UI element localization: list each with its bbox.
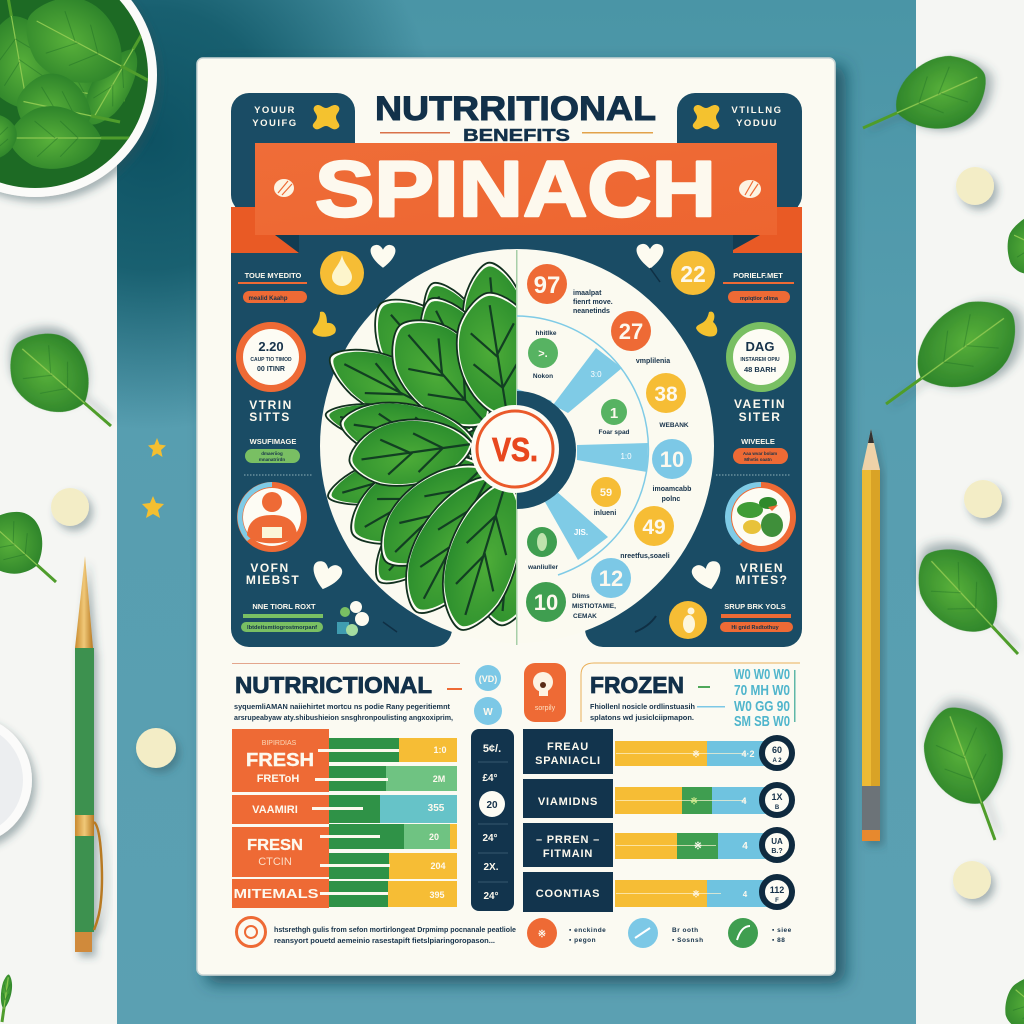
right stat circle: INSTAREM OPIU (740, 357, 780, 363)
footer note with target icon (236, 918, 516, 946)
left panel items: mealid Kaahp (248, 296, 288, 302)
left label: VTRIN SITTS (244, 398, 313, 475)
right panel items: mpiqtior olima (740, 296, 779, 302)
right label: VAETIN SITER: VAETIN (734, 397, 786, 411)
bowl of salt (0, 715, 32, 845)
left stat circle (236, 322, 306, 392)
left header tab (231, 93, 355, 213)
wheel: number badges and labels (526, 264, 692, 622)
footer note with target icon: reansyort pouetd aemeinio rasestapift fietslpiaringoropason... (274, 936, 495, 945)
left label: VOFN MIEBST: NNE TIORL ROXT (252, 602, 316, 611)
wheel: number badges and labels: Foar spad (598, 429, 630, 436)
fresh labels column: CTCIN (258, 856, 292, 868)
right label: VRIEN MITES: MITES? (736, 573, 788, 587)
spinach leaf: bottom left (0, 498, 77, 605)
left label: VOFN MIEBST: VOFN (250, 561, 290, 575)
food icon circle (725, 482, 796, 552)
right panel items (637, 244, 794, 337)
fresh labels column (232, 729, 329, 908)
centre score column: 24° (483, 891, 499, 902)
footer legend: ▪ enckinde (569, 927, 606, 934)
left header tab: YOUIFG (252, 118, 298, 129)
wheel: number badges and labels: imoamcabb (653, 486, 691, 493)
spinach leaf: left (0, 316, 136, 453)
fresh bars chart: 20 (429, 832, 439, 842)
frozen key glyph grid: 70 MH W0 (734, 682, 790, 699)
right label: VRIEN MITES: VRIEN (740, 561, 784, 575)
frozen bars chart: B.? (771, 848, 783, 855)
frozen bars chart: ※ (690, 796, 698, 806)
frozen labels column: VIAMIDNS (538, 796, 598, 808)
frozen key glyph grid: W0 W0 W0 (734, 666, 790, 683)
fresh bars chart (312, 738, 457, 907)
right stat circle: 48 BARH (744, 365, 776, 374)
right label: VRIEN MITES: SRUP BRK YOLS (724, 602, 786, 611)
title: NUTRRITIONAL (375, 90, 656, 128)
centre score column (471, 729, 514, 911)
wheel: number badges and labels: MISTIOTAMIE, (572, 603, 616, 610)
wheel: number badges and labels: 12 (599, 566, 623, 591)
divider line (516, 250, 518, 645)
frozen bars chart: 60 (772, 745, 782, 755)
frozen labels column: FITMAIN (543, 848, 593, 860)
right stat circle (726, 322, 796, 392)
wheel: number badges and labels: WEBANK (659, 422, 689, 429)
left label: VTRIN SITTS: VTRIN (249, 398, 293, 412)
frozen bars chart: 4·2 (741, 749, 755, 759)
fresh labels column: FRESN (247, 837, 303, 854)
navy main panel, centre (440, 220, 600, 420)
left stat circle: 2.20 (258, 339, 284, 354)
section head: Nutritional (232, 663, 462, 722)
banner: SPINACH: SPINACH (315, 144, 716, 233)
footer legend: ▪ 88 (772, 937, 785, 944)
left label: VTRIN SITTS: dmaeriiog (261, 451, 283, 456)
centre score column: 5¢/. (483, 743, 501, 755)
section head: Nutritional: syquemliAMAN naiiehirtet mortcu ns podie Rany pegeritiemnt (234, 702, 450, 711)
small blue badges: W (483, 707, 493, 718)
wheel: number badges and labels: Dlims (572, 593, 590, 600)
spinach leaf: top right (849, 42, 999, 161)
frozen labels column: FREAU (547, 741, 589, 753)
wheel: number badges and labels: 59 (600, 487, 612, 499)
footer legend: ▪ siee (772, 927, 792, 934)
frozen bars chart: 4 (741, 796, 747, 806)
fresh labels column: MITEMALS (234, 886, 319, 901)
wheel: number badges and labels: imaalpat (573, 290, 602, 297)
wheel: number badges and labels: fienrt move. (573, 299, 613, 306)
frozen labels column: SPANIACLI (535, 755, 601, 767)
frozen bars chart: 4 (742, 841, 748, 852)
left panel items: TOUE MYEDITO (245, 271, 302, 280)
fresh bars chart: 1:0 (433, 745, 447, 755)
frozen bars chart: ※ (692, 889, 700, 899)
spinach leaf: middle right (864, 282, 1024, 436)
right panel items: PORIELF.MET (733, 271, 783, 280)
frozen key glyph grid: W0 GG 90 (734, 698, 790, 715)
section head: Nutritional: arsrupeabyaw aty.shibushieion snsghronpoulisting angxoxiprim, (234, 713, 453, 722)
footer legend: ▪ Sosnsh (672, 937, 704, 944)
right label: VAETIN SITER: Mhvtis oaatn (744, 457, 772, 462)
fresh bars chart: 2M (433, 774, 445, 784)
wheel: number badges and labels: vmplilenia (636, 358, 670, 365)
fresh labels column: FREToH (257, 773, 299, 785)
central circle (320, 249, 714, 643)
footer legend: ▪ pegon (569, 937, 596, 944)
wheel: number badges and labels: polnc (662, 496, 680, 503)
VS badge: VS. (492, 431, 538, 468)
wheel: number badges and labels: 10 (660, 447, 684, 472)
orange bulb icon tile: sorpily (535, 705, 556, 712)
centre score column: £4° (482, 773, 498, 784)
spinach leaf: lower right (901, 531, 1024, 678)
wheel: number badges and labels: 49 (642, 516, 666, 539)
gold and green pen (75, 556, 102, 952)
wheel: number badges and labels: inlueni (594, 510, 616, 517)
comparison wheel wedges: 1:0 (620, 452, 632, 461)
right header tab (677, 93, 802, 213)
bowl of spinach leaves (0, 0, 176, 197)
left label: VTRIN SITTS: WSUFIMAGE (250, 437, 296, 446)
wheel: number badges and labels: 27 (619, 319, 643, 344)
wheel: number badges and labels: neanetinds (573, 308, 610, 315)
footer legend (527, 918, 792, 948)
left label: VTRIN SITTS: SITTS (249, 410, 291, 424)
right stat circle: DAG (746, 339, 774, 354)
section head: Nutritional: NUTRRICTIONAL (235, 672, 432, 698)
frozen bars chart: ※ (694, 841, 702, 852)
frozen bars chart: B (775, 805, 780, 811)
comparison wheel wedges (517, 316, 648, 575)
frozen bars chart: 1X (771, 792, 783, 802)
footer legend: ※ (538, 929, 546, 940)
centre score column: 2X. (483, 862, 499, 873)
person icon circle (237, 482, 307, 552)
centre score column: 24° (482, 833, 498, 844)
frozen labels column: – PRREN – (536, 834, 600, 846)
spinach bunch (324, 262, 516, 631)
ribbon folds (231, 207, 802, 253)
footer note with target icon: hstsrethgh gulis from sefon mortirlongeat Drpmimp pocnanale peatliole (274, 925, 516, 934)
navy main panel, right (585, 200, 802, 647)
frozen key glyph grid (734, 666, 796, 730)
small blue badges: (VD) (479, 674, 497, 684)
small blue badges (474, 665, 502, 725)
wheel: number badges and labels: hhitlke (536, 330, 557, 337)
spinach leaf: bottom right (911, 695, 1024, 853)
spinach leaf: bottom right corner (994, 964, 1024, 1024)
frozen labels column (523, 729, 613, 912)
frozen bars chart (615, 738, 792, 907)
orange bulb icon tile (524, 663, 566, 722)
right label: VAETIN SITER: Aaa wvar bolam (743, 451, 777, 456)
fresh labels column: BIPIRDIAS (262, 740, 297, 747)
frozen bars chart: UA (771, 837, 783, 846)
right label: VAETIN SITER: WIVEELE (741, 437, 775, 446)
background: dark shading top left (117, 0, 537, 440)
section head: Frozen (581, 663, 800, 722)
background: teal backdrop (117, 0, 916, 1024)
wheel: number badges and labels: 10 (534, 590, 558, 615)
section head: Frozen: Fhiollenl nosicle ordlinstuasih (590, 702, 695, 711)
wheel: number badges and labels: 38 (654, 383, 678, 406)
left panel items (238, 245, 395, 337)
spinach leaf: right edge (997, 204, 1024, 293)
wheel: number badges and labels: >. (538, 348, 548, 360)
fresh bars chart: 204 (430, 861, 446, 871)
section head: Frozen: FROZEN (590, 672, 684, 698)
right label: VAETIN SITER: SITER (739, 410, 781, 424)
comparison wheel wedges: 3:0 (590, 370, 602, 379)
right panel items: 22 (680, 261, 706, 287)
fresh bars chart: 395 (429, 890, 445, 900)
navy main panel, left (231, 200, 452, 647)
pencil (862, 429, 880, 841)
left stat circle: 00 ITINR (257, 366, 285, 373)
comparison wheel wedges: JIS. (574, 528, 588, 537)
wheel: number badges and labels: Nokon (533, 373, 553, 380)
wheel: number badges and labels: nreetfus,soaeli (620, 553, 670, 560)
footer legend: Br ooth (672, 927, 699, 934)
right header tab: YODUU (736, 118, 778, 129)
fresh bars chart: 355 (428, 803, 445, 814)
fresh labels column: VAAMIRI (252, 804, 298, 816)
frozen bars chart: 112 (770, 885, 784, 895)
VS badge (471, 405, 559, 493)
right label: VRIEN MITES (635, 560, 793, 639)
fresh labels column: FRESH (246, 750, 314, 770)
left label: VOFN MIEBST (241, 560, 397, 636)
wheel: number badges and labels: wanliuller (527, 564, 558, 571)
right label: VAETIN SITER (716, 397, 790, 475)
stars and cream discs (51, 167, 1002, 899)
right label: VRIEN MITES: Hi gnid Rsdtothuy (731, 625, 780, 631)
frozen bars chart: A 2 (772, 758, 782, 764)
centre score column: 20 (486, 800, 498, 811)
frozen key glyph grid: SM SB W0 (734, 713, 790, 730)
frozen bars chart: 4 (743, 890, 748, 899)
banner: SPINACH (255, 143, 777, 235)
left label: VOFN MIEBST: lbtdeitsmtiogrostmorpanf (247, 625, 317, 631)
right header tab: VTILLNG (731, 105, 783, 116)
spinach leaf: bottom corner left (0, 974, 14, 1023)
frozen bars chart: F (775, 898, 779, 904)
left label: VTRIN SITTS: mnanatrirdn (259, 457, 285, 462)
poster card (197, 58, 835, 975)
wheel: number badges and labels: 1 (610, 405, 618, 422)
wheel: number badges and labels: 97 (534, 272, 560, 299)
left label: VOFN MIEBST: MIEBST (246, 573, 300, 587)
section head: Frozen: splatons wd jusiclciipmapon. (590, 713, 694, 722)
frozen labels column: COONTIAS (536, 888, 600, 900)
frozen bars chart: ※ (692, 749, 700, 759)
wheel: number badges and labels: CEMAK (573, 613, 597, 620)
title (375, 90, 656, 145)
left stat circle: CAUP TIO TIMOD (250, 357, 292, 363)
title: BENEFITS (463, 125, 570, 145)
left header tab: YOUUR (254, 105, 296, 116)
